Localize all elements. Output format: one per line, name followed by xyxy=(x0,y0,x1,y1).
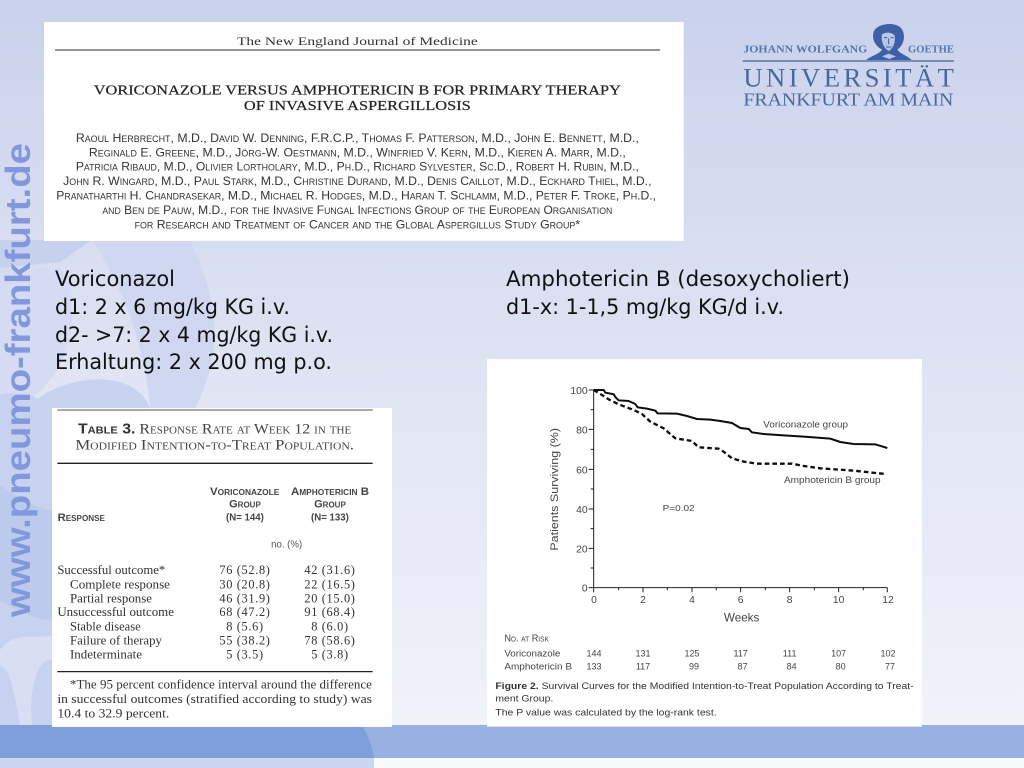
number at risk table: 84 xyxy=(787,662,797,672)
panel: response rate table: 20 (15.0) xyxy=(304,591,356,605)
table title: Table 3. Response Rate at Week 12 in the xyxy=(78,422,351,438)
figure caption: The P value was calculated by the log-rank test. xyxy=(495,708,717,718)
number at risk table: 99 xyxy=(689,662,699,672)
table footnote xyxy=(57,677,373,720)
table rows: Successful outcome* xyxy=(57,563,165,577)
panel: response rate table: 68 (47.2) xyxy=(219,605,271,619)
axis labels: 2 xyxy=(640,595,646,606)
table footnote: 10.4 to 32.9 percent. xyxy=(57,706,169,720)
number at risk table: 131 xyxy=(635,649,650,659)
axis labels: 0 xyxy=(582,584,588,595)
table title: Modified Intention-to-Treat Population. xyxy=(75,438,354,454)
axis labels: Patients Surviving (%) xyxy=(549,428,561,551)
panel: response rate table: 8 (6.0) xyxy=(311,620,349,634)
number at risk table: 111 xyxy=(783,649,796,659)
author list: Reginald E. Greene, M.D., Jörg-W. Oestmann, M.D., Winfried V. Kern, M.D., Kieren A. Marr, M.D., xyxy=(89,146,626,159)
axis labels xyxy=(549,386,894,625)
author list: for Research and Treatment of Cancer and the Global Aspergillus Study Group* xyxy=(135,218,581,231)
author list: Patricia Ribaud, M.D., Olivier Lortholary, M.D., Ph.D., Richard Sylvester, Sc.D., Robert H. Rubin, M.D., xyxy=(76,160,639,173)
axis labels: 100 xyxy=(570,386,588,397)
axis labels: 8 xyxy=(787,595,793,606)
author list: Raoul Herbrecht, M.D., David W. Denning, F.R.C.P., Thomas F. Patterson, M.D., John E. Bennett, M.D., xyxy=(76,131,639,145)
icon: Goethe portrait xyxy=(866,24,912,60)
number at risk table: 107 xyxy=(831,649,846,659)
bottom band xyxy=(0,725,1024,768)
table rows: Partial response xyxy=(70,591,153,605)
axis labels: 10 xyxy=(833,595,845,606)
panel: response rate table: 8 (5.6) xyxy=(226,620,264,634)
panel: response rate table: 91 (68.4) xyxy=(304,605,356,619)
table column headers: (N= 144) xyxy=(226,512,264,523)
logo small text: JOHANN WOLFGANG xyxy=(743,44,867,55)
table footnote: in successful outcomes (stratified according to study) was xyxy=(57,692,372,706)
article title xyxy=(94,83,621,114)
text block: Voriconazol dosing: Voriconazol xyxy=(55,267,175,291)
table rows: Indeterminate xyxy=(70,648,143,662)
vertical website text: www.pneumo-frankfurt.de xyxy=(0,143,38,618)
number at risk table: 102 xyxy=(880,649,895,659)
axis labels: Weeks xyxy=(724,612,760,625)
number at risk table: No. at Risk xyxy=(504,633,549,644)
panel: response rate table: 42 (31.6) xyxy=(304,563,356,577)
number at risk table: Voriconazole xyxy=(504,649,560,659)
panel: response rate table: 78 (58.6) xyxy=(304,633,356,647)
number at risk table: 77 xyxy=(885,662,895,672)
panel: response rate table: 46 (31.9) xyxy=(219,591,271,605)
author list: Pranatharthi H. Chandrasekar, M.D., Michael R. Hodges, M.D., Haran T. Schlamm, M.D., Peter F. Troke, Ph.D., xyxy=(56,189,656,202)
logo wordmark: UNIVERSITÄT xyxy=(743,63,954,93)
table column headers: Voriconazole xyxy=(210,486,280,498)
author list: John R. Wingard, M.D., Paul Stark, M.D., Christine Durand, M.D., Denis Caillot, M.D., Eckhard Thiel, M.D., xyxy=(63,174,652,188)
number at risk table xyxy=(504,633,895,672)
text block: Voriconazol dosing: Erhaltung: 2 x 200 mg p.o. xyxy=(55,350,332,374)
article title: VORICONAZOLE VERSUS AMPHOTERICIN B FOR PRIMARY THERAPY xyxy=(94,83,621,98)
university logo: FRANKFURT AM MAIN xyxy=(743,90,954,110)
number at risk table: 144 xyxy=(586,649,601,659)
journal name: The New England Journal of Medicine xyxy=(237,34,478,48)
panel: survival chart: P=0.02 xyxy=(663,503,695,513)
number at risk table: 87 xyxy=(738,662,748,672)
panel: response rate table: 30 (20.8) xyxy=(219,578,271,592)
number at risk table: 117 xyxy=(733,649,748,659)
number at risk table: 80 xyxy=(836,662,846,672)
text block: Voriconazol dosing xyxy=(55,267,333,374)
axis labels: 20 xyxy=(576,544,588,555)
panel: response rate table: no. (%) xyxy=(271,540,302,551)
panel: response rate table xyxy=(52,408,392,727)
axis labels: 40 xyxy=(576,505,588,516)
panel: response rate table: 5 (3.5) xyxy=(226,648,264,662)
university logo: GOETHE xyxy=(908,44,954,55)
university logo xyxy=(743,24,954,110)
table rows xyxy=(57,563,175,662)
axis labels: 12 xyxy=(882,595,894,606)
figure caption xyxy=(495,681,914,718)
article title: OF INVASIVE ASPERGILLOSIS xyxy=(244,98,471,114)
number at risk table: 125 xyxy=(684,649,699,659)
panel: article header xyxy=(44,22,684,241)
table title xyxy=(75,422,354,454)
table rows: Complete response xyxy=(70,578,171,592)
text block: Amphotericin B dosing: d1-x: 1-1,5 mg/kg KG/d i.v. xyxy=(506,295,784,319)
axis labels: 4 xyxy=(689,595,695,606)
number at risk table: Amphotericin B xyxy=(504,662,572,672)
table rows: Unsuccessful outcome xyxy=(57,605,175,619)
figure caption: ment Group. xyxy=(495,693,553,703)
panel: survival chart: Amphotericin B group xyxy=(784,475,881,485)
figure caption: Figure 2. Survival Curves for the Modified Intention-to-Treat Population According to Treat- xyxy=(495,681,914,691)
panel: response rate table: 76 (52.8) xyxy=(219,563,271,577)
text block: Amphotericin B dosing xyxy=(506,267,850,319)
author list xyxy=(56,131,656,231)
table rows: Failure of therapy xyxy=(70,633,163,647)
table column headers xyxy=(58,486,369,524)
table column headers: Amphotericin B xyxy=(291,486,369,498)
panel: response rate table: 22 (16.5) xyxy=(304,578,356,592)
panel: survival chart xyxy=(487,359,922,727)
table column headers: (N= 133) xyxy=(311,512,349,523)
table rows: Stable disease xyxy=(70,620,141,634)
axis labels: 0 xyxy=(591,595,597,606)
curve labels: Voriconazole group xyxy=(763,419,848,429)
table column headers: Group xyxy=(314,499,346,511)
table footnote: *The 95 percent confidence interval around the difference xyxy=(70,677,373,691)
chart axes xyxy=(589,390,887,592)
text block: Voriconazol dosing: d2- >7: 2 x 4 mg/kg KG i.v. xyxy=(55,323,333,347)
curve: Amphotericin B group xyxy=(594,390,885,474)
text block: Amphotericin B dosing: Amphotericin B (desoxycholiert) xyxy=(506,267,850,291)
panel: response rate table: 55 (38.2) xyxy=(219,633,271,647)
number at risk table: 117 xyxy=(636,662,650,672)
text block: Voriconazol dosing: d1: 2 x 6 mg/kg KG i.v. xyxy=(55,295,290,319)
table column headers: Response xyxy=(58,512,106,524)
axis labels: 80 xyxy=(576,425,588,436)
panel: response rate table: 5 (3.8) xyxy=(311,648,349,662)
author list: and Ben de Pauw, M.D., for the Invasive Fungal Infections Group of the European Organisation xyxy=(102,203,612,217)
table column headers: Group xyxy=(229,499,261,511)
axis labels: 60 xyxy=(576,465,588,476)
number at risk table: 133 xyxy=(586,662,601,672)
curve: Voriconazole group xyxy=(594,390,887,448)
axis labels: 6 xyxy=(738,595,744,606)
